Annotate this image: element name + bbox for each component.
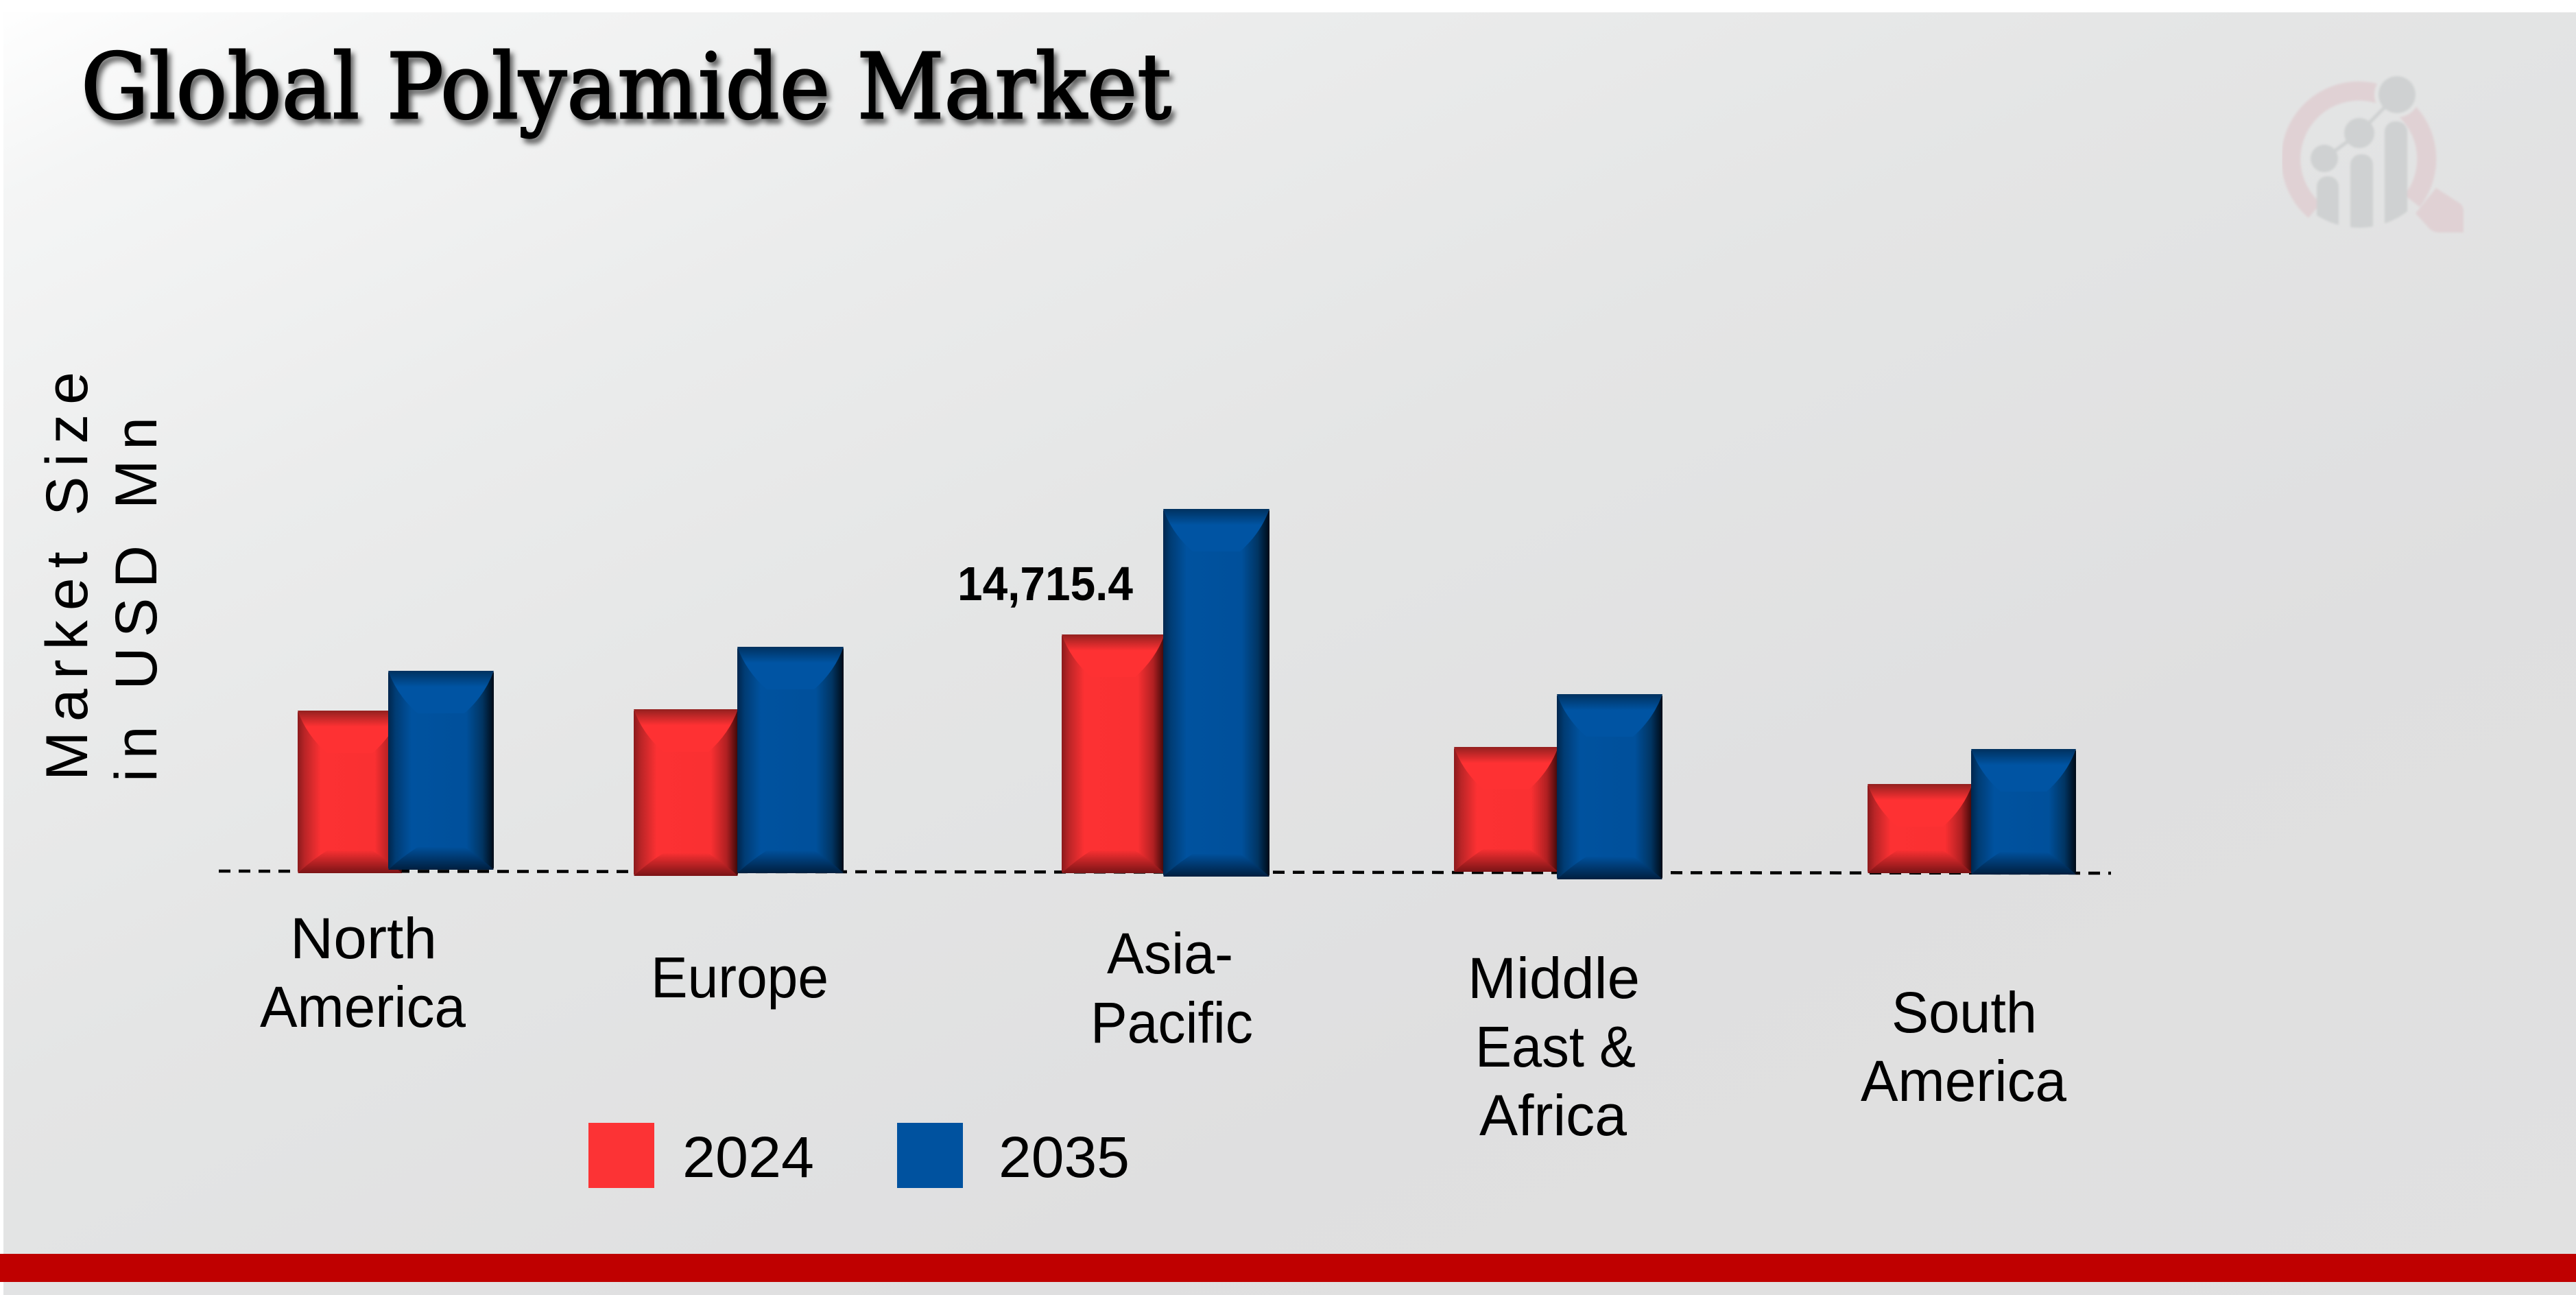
- y-axis title: in USD Mn: [104, 417, 169, 782]
- North America 2035 bar: [388, 671, 494, 870]
- label: Asia-Pacific: [1090, 921, 1253, 1055]
- South America 2024 bar: [1868, 784, 1972, 873]
- Middle East and Africa 2024 bar: [1454, 747, 1558, 872]
- label: Middle East & Africa: Middle: [1468, 946, 1640, 1010]
- y-axis title: [34, 372, 169, 782]
- title: Global Polyamide Market: [81, 34, 1171, 140]
- bar chart: [298, 509, 2076, 879]
- Europe 2024 bar: [634, 709, 738, 876]
- data label: Asia-Pacific 2024 value: 14,715.4: [957, 557, 1133, 610]
- Asia-Pacific 2024 bar: [1062, 634, 1165, 873]
- Europe 2035 bar: [737, 647, 844, 873]
- legend swatch 2024: [588, 1123, 654, 1188]
- Asia-Pacific 2035 bar: [1163, 509, 1269, 877]
- label: Middle East & Africa: East &: [1475, 1014, 1636, 1079]
- legend label 2035: 2035: [999, 1125, 1130, 1189]
- label: South America: America: [1861, 1049, 2066, 1113]
- legend label 2024: 2024: [682, 1125, 814, 1189]
- bottom red bar: [0, 1254, 2576, 1282]
- label: North America: America: [260, 975, 466, 1039]
- label: Asia-Pacific: Pacific: [1090, 990, 1253, 1055]
- category labels: [260, 906, 2066, 1148]
- label: North America: North: [290, 906, 437, 971]
- label: Middle East & Africa: [1468, 946, 1640, 1148]
- South America 2035 bar: [1971, 749, 2076, 875]
- label: North America: [260, 906, 466, 1039]
- icon: watermark logo: [2291, 72, 2464, 240]
- Middle East and Africa 2035 bar: [1557, 694, 1662, 879]
- North America 2024 bar: [298, 711, 402, 873]
- legend: [588, 1123, 1130, 1189]
- label: South America: South: [1892, 980, 2037, 1045]
- label: Middle East & Africa: Africa: [1479, 1083, 1627, 1148]
- label: South America: [1861, 980, 2066, 1113]
- axis baseline dashed: [219, 871, 2111, 873]
- label: Asia-Pacific: Asia-: [1107, 921, 1233, 986]
- y-axis title: Market Size: [34, 372, 100, 781]
- legend swatch 2035: [897, 1123, 963, 1188]
- label: Europe: Europe: [651, 945, 828, 1010]
